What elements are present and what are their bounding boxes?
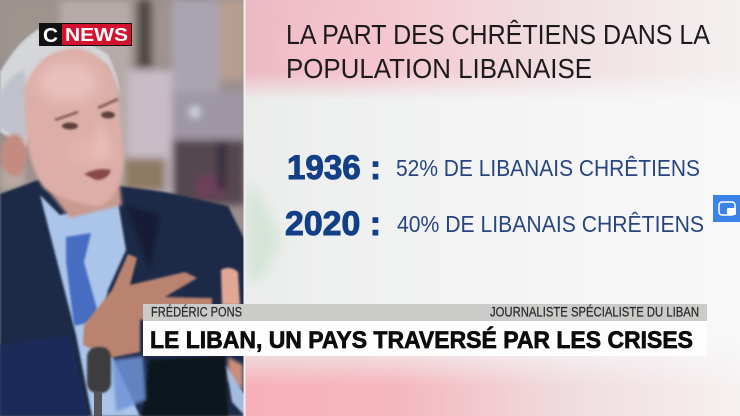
heading: POPULATION LIBANAISE [286, 53, 592, 84]
statistic: 1936: 52% DE LIBANAIS CHRÊTIENS [396, 155, 700, 181]
tie [66, 233, 100, 326]
panel: studio photo of speaker [0, 0, 245, 416]
neck [40, 170, 122, 218]
divider edge between photo and graphic [244, 0, 246, 416]
headline bar: LE LIBAN, UN PAYS TRAVERSÉ PAR LES CRISES [150, 326, 693, 354]
logo: CNews: NEWS [65, 25, 128, 45]
speaker name bar: JOURNALISTE SPÉCIALISTE DU LIBAN [490, 304, 699, 320]
statistic: 2020: 2020 : [285, 205, 381, 243]
statistic: 2020 [285, 205, 704, 243]
hands [83, 254, 212, 358]
icon: picture-in-picture button [713, 195, 740, 222]
statistic: 1936 [287, 149, 700, 187]
logo: CNews [39, 23, 132, 47]
lower third banner [143, 304, 707, 356]
heading [286, 19, 711, 84]
logo: CNews: C [43, 25, 58, 47]
face [24, 48, 124, 206]
statistic: 1936: 1936 : [287, 149, 381, 187]
speaker name bar: FRÉDÉRIC PONS [151, 304, 242, 320]
hair [0, 27, 120, 148]
speaker name bar [143, 304, 707, 321]
suit jacket [0, 180, 245, 416]
microphone [87, 347, 111, 416]
heading: LA PART DES CHRÊTIENS DANS LA [286, 19, 711, 50]
ear [1, 134, 27, 176]
panel: Lebanese flag graphic background [245, 0, 740, 416]
shirt [40, 195, 140, 416]
statistic: 2020: 40% DE LIBANAIS CHRÊTIENS [397, 211, 704, 237]
